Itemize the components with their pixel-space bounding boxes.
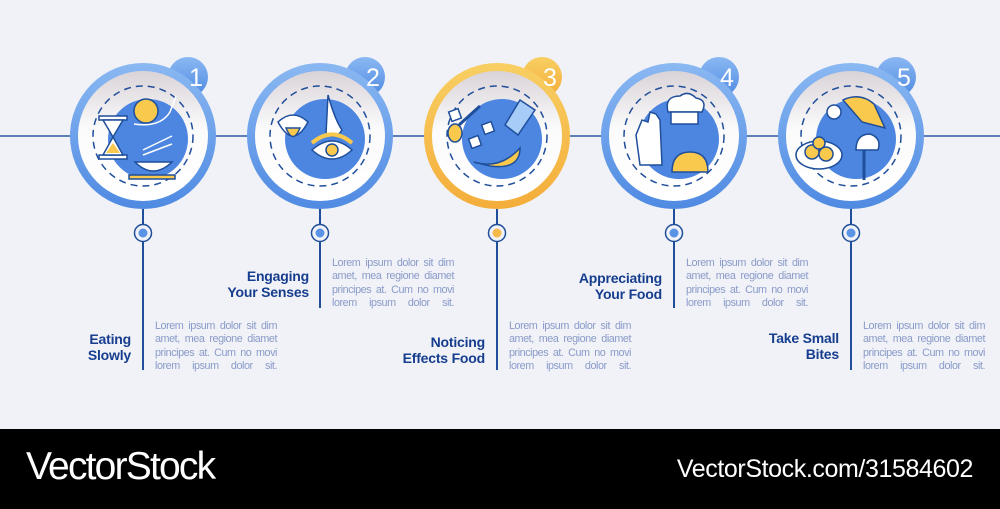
step 1 title <box>88 331 131 363</box>
step 3 circle <box>424 57 570 370</box>
step 2 circle: 2 <box>366 64 380 92</box>
step 1 circle: 1 <box>189 64 203 92</box>
step 2 title: Engaging <box>247 268 309 284</box>
step 3 title <box>403 334 485 366</box>
step 3 title: Noticing <box>431 334 485 350</box>
step 5 text: Lorem ipsum dolor sit dim <box>863 320 985 332</box>
step 5 title: Take Small <box>769 330 839 346</box>
step 5 title <box>769 330 839 362</box>
step 1 title: Slowly <box>88 347 131 363</box>
step 1 text: lorem ipsum dolor sit. <box>155 360 277 372</box>
step 4 circle: 4 <box>720 64 734 92</box>
step 4 title: Appreciating <box>579 270 662 286</box>
step 5 title: Bites <box>806 346 839 362</box>
step 2 text <box>332 257 454 309</box>
step 1 text <box>155 320 278 372</box>
step 1 title: Eating <box>89 331 131 347</box>
icon: spoon, salt, chili <box>448 100 535 167</box>
step 4 text: Lorem ipsum dolor sit dim <box>686 257 808 269</box>
step 3 text: lorem ipsum dolor sit. <box>509 360 631 372</box>
step 2 text: lorem ipsum dolor sit. <box>332 297 454 309</box>
icon: hand, broccoli, bowl, mushroom <box>796 97 885 180</box>
step 4 text: principes at. Cum no movi <box>686 284 808 296</box>
step 3 text: principes at. Cum no movi <box>509 347 631 359</box>
step 4 title <box>579 270 662 302</box>
step 2 title <box>227 268 309 300</box>
step 1 text: Lorem ipsum dolor sit dim <box>155 320 277 332</box>
step 2 circle <box>247 57 393 308</box>
step 5 text: lorem ipsum dolor sit. <box>863 360 985 372</box>
icon: tongue, nose, eye <box>278 95 352 159</box>
step 1 text: amet, mea regione diamet <box>155 333 277 345</box>
step 2 text: Lorem ipsum dolor sit dim <box>332 257 454 269</box>
step 5 circle: 5 <box>897 64 911 92</box>
step 2 text: amet, mea regione diamet <box>332 270 454 282</box>
step 5 text: amet, mea regione diamet <box>863 333 985 345</box>
timeline line <box>0 135 1000 137</box>
step 4 text <box>686 257 808 309</box>
footer <box>0 429 1000 509</box>
step 5 circle <box>778 57 924 370</box>
footer logo: VectorStock <box>26 445 214 488</box>
step 2 text: principes at. Cum no movi <box>332 284 454 296</box>
step 3 circle: 3 <box>543 64 557 92</box>
step 3 text <box>509 320 632 372</box>
step 4 title: Your Food <box>595 286 662 302</box>
step 4 circle <box>601 57 747 308</box>
step 1 circle <box>70 57 216 370</box>
step 3 text: Lorem ipsum dolor sit dim <box>509 320 631 332</box>
step 5 text: principes at. Cum no movi <box>863 347 985 359</box>
step 3 title: Effects Food <box>403 350 485 366</box>
step 1 text: principes at. Cum no movi <box>155 347 277 359</box>
step 5 text <box>863 320 986 372</box>
icon: hourglass, apple, noodles <box>99 96 176 179</box>
step 4 text: lorem ipsum dolor sit. <box>686 297 808 309</box>
step 4 text: amet, mea regione diamet <box>686 270 808 282</box>
step 2 title: Your Senses <box>227 284 309 300</box>
icon: hand, chef hat, bread <box>636 93 708 172</box>
footer url: VectorStock.com/31584602 <box>677 455 973 483</box>
step 3 text: amet, mea regione diamet <box>509 333 631 345</box>
